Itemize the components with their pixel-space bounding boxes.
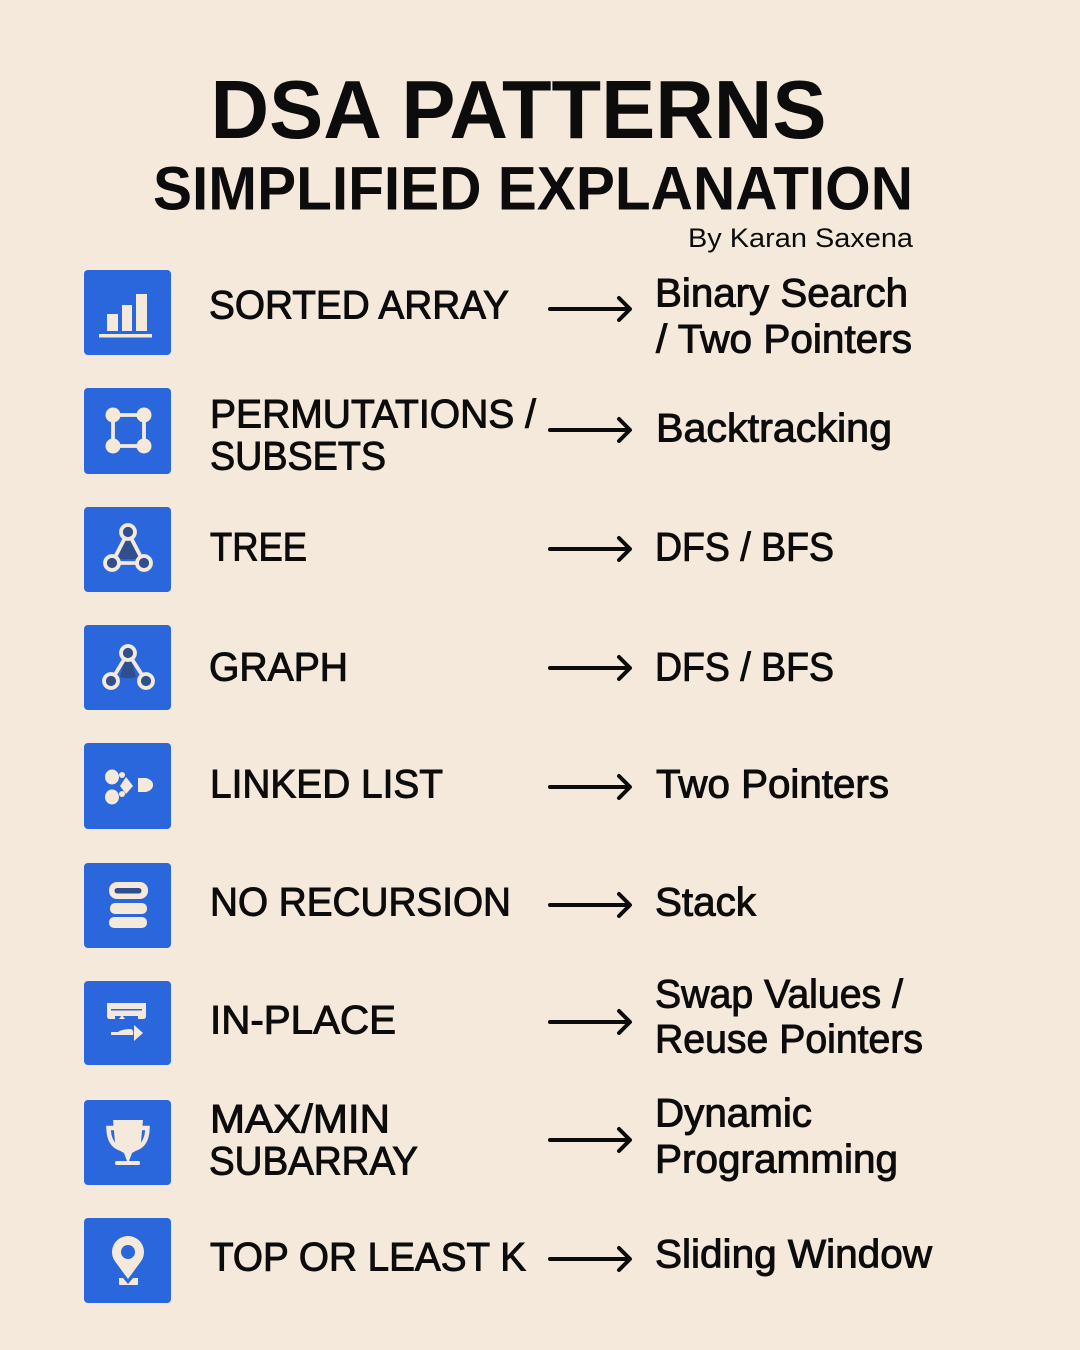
- row: max/min subarray: [84, 1092, 898, 1185]
- row: sorted array: [84, 270, 912, 362]
- arrow: [550, 298, 630, 320]
- result: swap values / reuse pointers: Swap Values /: [655, 972, 903, 1016]
- row: top or least k: [84, 1218, 932, 1303]
- label: permutations / subsets: SUBSETS: [210, 434, 386, 478]
- arrow: [550, 419, 630, 441]
- label: permutations / subsets: [210, 392, 536, 478]
- result: two pointers: Two Pointers: [656, 762, 889, 806]
- result: swap values / reuse pointers: Reuse Pointers: [655, 1018, 923, 1062]
- arrow: [550, 538, 630, 560]
- subtitle: SIMPLIFIED EXPLANATION: [153, 154, 913, 222]
- result: dfs / bfs: DFS / BFS: [655, 526, 834, 570]
- icon: square nodes: [84, 388, 171, 474]
- label: max/min subarray: SUBARRAY: [209, 1140, 418, 1184]
- result: stack: Stack: [655, 880, 756, 924]
- arrow: [550, 657, 630, 679]
- row: graph: [84, 625, 834, 710]
- icon: linked nodes: [84, 743, 171, 829]
- label: top or least k: TOP OR LEAST K: [210, 1236, 526, 1280]
- title: DSA PATTERNS: [210, 63, 826, 156]
- author credit: By Karan Saxena: [688, 223, 914, 253]
- label: tree: TREE: [210, 526, 307, 570]
- arrow: [550, 894, 630, 916]
- row: permutations / subsets: [84, 388, 892, 478]
- icon: swap device and arrow: [84, 981, 171, 1065]
- row: linked list: [84, 743, 889, 829]
- arrow: [550, 1248, 630, 1270]
- label: graph: GRAPH: [209, 646, 348, 690]
- arrow: [550, 776, 630, 798]
- label: max/min subarray: [209, 1098, 418, 1184]
- icon: stack: [84, 863, 171, 948]
- result: binary search / two pointers: Binary Search: [655, 272, 908, 316]
- icon: trophy: [84, 1100, 171, 1185]
- icon: location pin: [84, 1218, 171, 1303]
- icon: tree nodes: [84, 507, 171, 592]
- result: dfs / bfs: DFS / BFS: [655, 646, 834, 690]
- label: permutations / subsets: PERMUTATIONS /: [210, 392, 536, 436]
- label: linked list: LINKED LIST: [210, 762, 443, 806]
- result: dynamic programming: Programming: [655, 1138, 898, 1182]
- result: dynamic programming: [655, 1092, 898, 1182]
- result: binary search / two pointers: [655, 272, 912, 362]
- label: sorted array: SORTED ARRAY: [209, 284, 509, 328]
- row: tree: [84, 507, 834, 592]
- result: swap values / reuse pointers: [655, 972, 923, 1062]
- label: in-place: IN-PLACE: [210, 998, 396, 1042]
- result: backtracking: Backtracking: [656, 406, 892, 450]
- row: in-place: [84, 972, 923, 1065]
- result: binary search / two pointers: / Two Pointers: [656, 318, 912, 362]
- result: dynamic programming: Dynamic: [655, 1092, 812, 1136]
- icon: graph nodes: [84, 625, 171, 710]
- icon: bar chart: [84, 270, 171, 355]
- result: sliding window: Sliding Window: [655, 1232, 932, 1276]
- arrow: [550, 1011, 630, 1033]
- label: max/min subarray: MAX/MIN: [210, 1098, 390, 1142]
- arrow: [550, 1129, 630, 1151]
- row: no recursion: [84, 863, 756, 948]
- label: no recursion: NO RECURSION: [210, 880, 511, 924]
